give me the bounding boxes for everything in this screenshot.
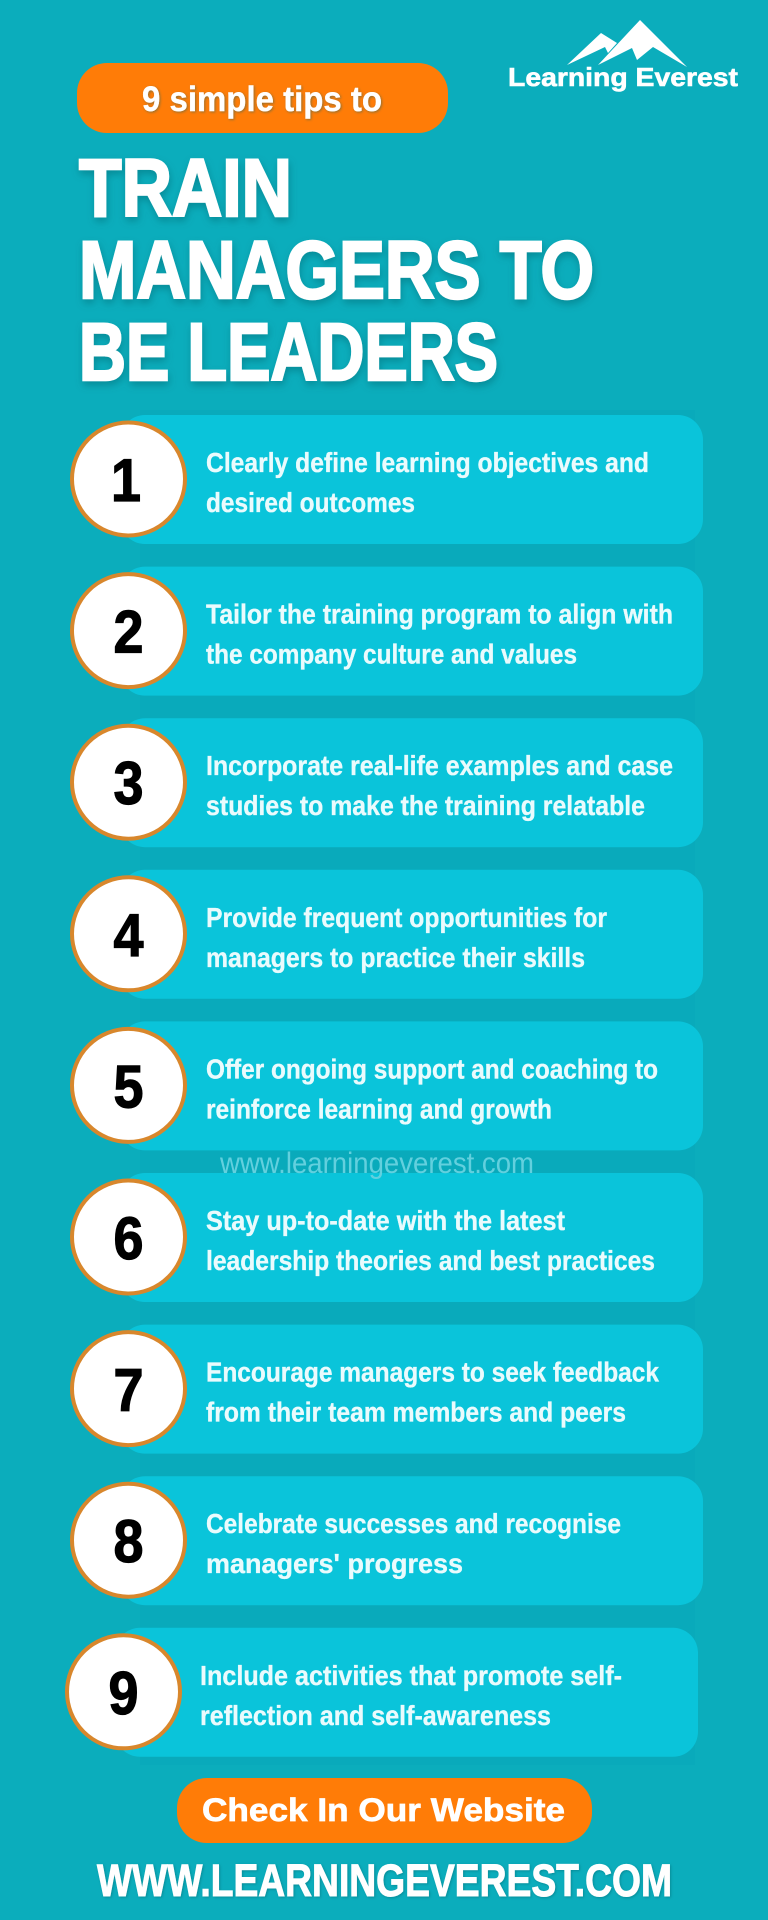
tip 6: 6 [114, 1205, 144, 1272]
tip 4: 4 [114, 902, 144, 969]
tip 2 [72, 567, 703, 696]
tip 1: desired outcomes [206, 487, 415, 518]
orange button: website call to action [177, 1778, 592, 1843]
tip 8: managers' progress [206, 1548, 463, 1579]
tip 1: Clearly define learning objectives and [206, 447, 649, 478]
title: TRAIN [79, 143, 292, 234]
tip 3: studies to make the training relatable [206, 790, 645, 821]
tip 5 [72, 1021, 703, 1150]
tip 7 [72, 1325, 703, 1454]
tip 7: 7 [114, 1357, 144, 1424]
tip 9: Include activities that promote self- [200, 1660, 622, 1691]
orange button: website call to action: Check In Our Website [202, 1792, 565, 1828]
orange pill: subtitle [77, 63, 448, 133]
tip 6: leadership theories and best practices [206, 1245, 655, 1276]
tip 6: Stay up-to-date with the latest [206, 1205, 565, 1236]
tip 5: reinforce learning and growth [206, 1093, 552, 1124]
title: BE LEADERS [79, 307, 498, 398]
tip 1 [72, 415, 703, 544]
tip 5: Offer ongoing support and coaching to [206, 1053, 658, 1084]
tip 5: 5 [114, 1053, 144, 1120]
tip 3 [72, 718, 703, 847]
tip 4: Provide frequent opportunities for [206, 902, 607, 933]
tip 2: the company culture and values [206, 639, 577, 670]
tip 6 [72, 1173, 703, 1302]
tip 1: 1 [111, 447, 141, 514]
tip 7: Encourage managers to seek feedback [206, 1357, 659, 1388]
tip 8: Celebrate successes and recognise [206, 1508, 621, 1539]
tip 2: Tailor the training program to align with [206, 599, 673, 630]
tip 2: 2 [114, 599, 144, 666]
tip 9: reflection and self-awareness [200, 1700, 551, 1731]
title [79, 143, 594, 398]
tip 9: 9 [108, 1660, 138, 1727]
icon: mountains [567, 20, 687, 67]
watermark: www.learningeverest.com [219, 1147, 534, 1180]
logo text: Learning Everest [508, 62, 738, 92]
tip 7: from their team members and peers [206, 1397, 626, 1428]
tip 3: 3 [114, 750, 144, 817]
logo: Learning Everest [508, 20, 738, 92]
tip 3: Incorporate real-life examples and case [206, 750, 673, 781]
tip 8 [72, 1476, 703, 1605]
title: MANAGERS TO [79, 225, 594, 316]
tip 8: 8 [114, 1508, 144, 1575]
tip 4 [72, 870, 703, 999]
orange pill: subtitle: 9 simple tips to [142, 80, 382, 119]
tip 9 [67, 1628, 698, 1757]
tip 4: managers to practice their skills [206, 942, 585, 973]
